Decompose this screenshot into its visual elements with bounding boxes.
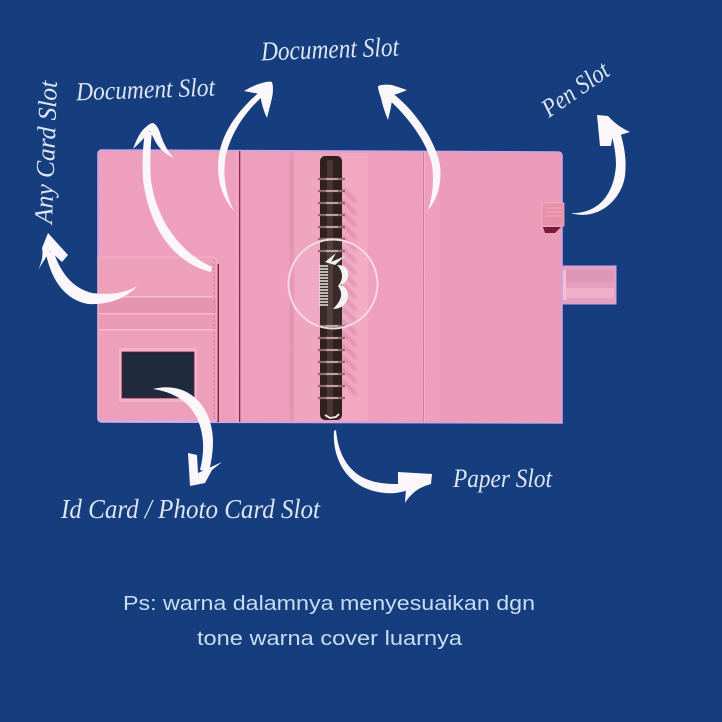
arrow: to any card slot: [38, 233, 137, 304]
ring mechanism: [318, 156, 345, 420]
inner spine folds: [290, 153, 368, 421]
right document slot seam: [423, 152, 561, 422]
card pocket: [98, 257, 219, 422]
logo: circle emblem: [288, 240, 378, 328]
logo mark: [319, 253, 348, 309]
arrow: to paper slot: [334, 430, 432, 503]
leather texture: [100, 152, 561, 421]
label: paper slot: Paper Slot: [452, 464, 553, 493]
note: line one: Ps: warna dalamnya menyesuaikan dgn: [123, 593, 535, 615]
arrow: to left document slot: [133, 123, 212, 272]
photo window: [119, 348, 197, 402]
left document slot seam: [236, 151, 240, 422]
metal rings: [318, 179, 345, 398]
pen loop: [542, 203, 564, 233]
label: any card slot: Any Card Slot: [29, 80, 63, 226]
strap: closure tab: [561, 266, 616, 304]
label: document slot left: Document Slot: [75, 73, 216, 106]
label: document slot top: Document Slot: [260, 32, 401, 66]
arrow: to ID card slot: [153, 387, 222, 486]
note: line two: tone warna cover luarnya: [197, 628, 463, 650]
panel: open binder: [98, 150, 616, 423]
binder interior: [98, 150, 562, 423]
label: id card photo card slot: Id Card / Photo Card Slot: [60, 494, 321, 524]
label: pen slot: Pen Slot: [535, 55, 615, 123]
arrow: to right document slot: [378, 85, 440, 210]
ring shadow: [342, 188, 356, 394]
arrow: to pen slot: [571, 115, 630, 215]
arrow: to centre document slot: [218, 82, 273, 211]
